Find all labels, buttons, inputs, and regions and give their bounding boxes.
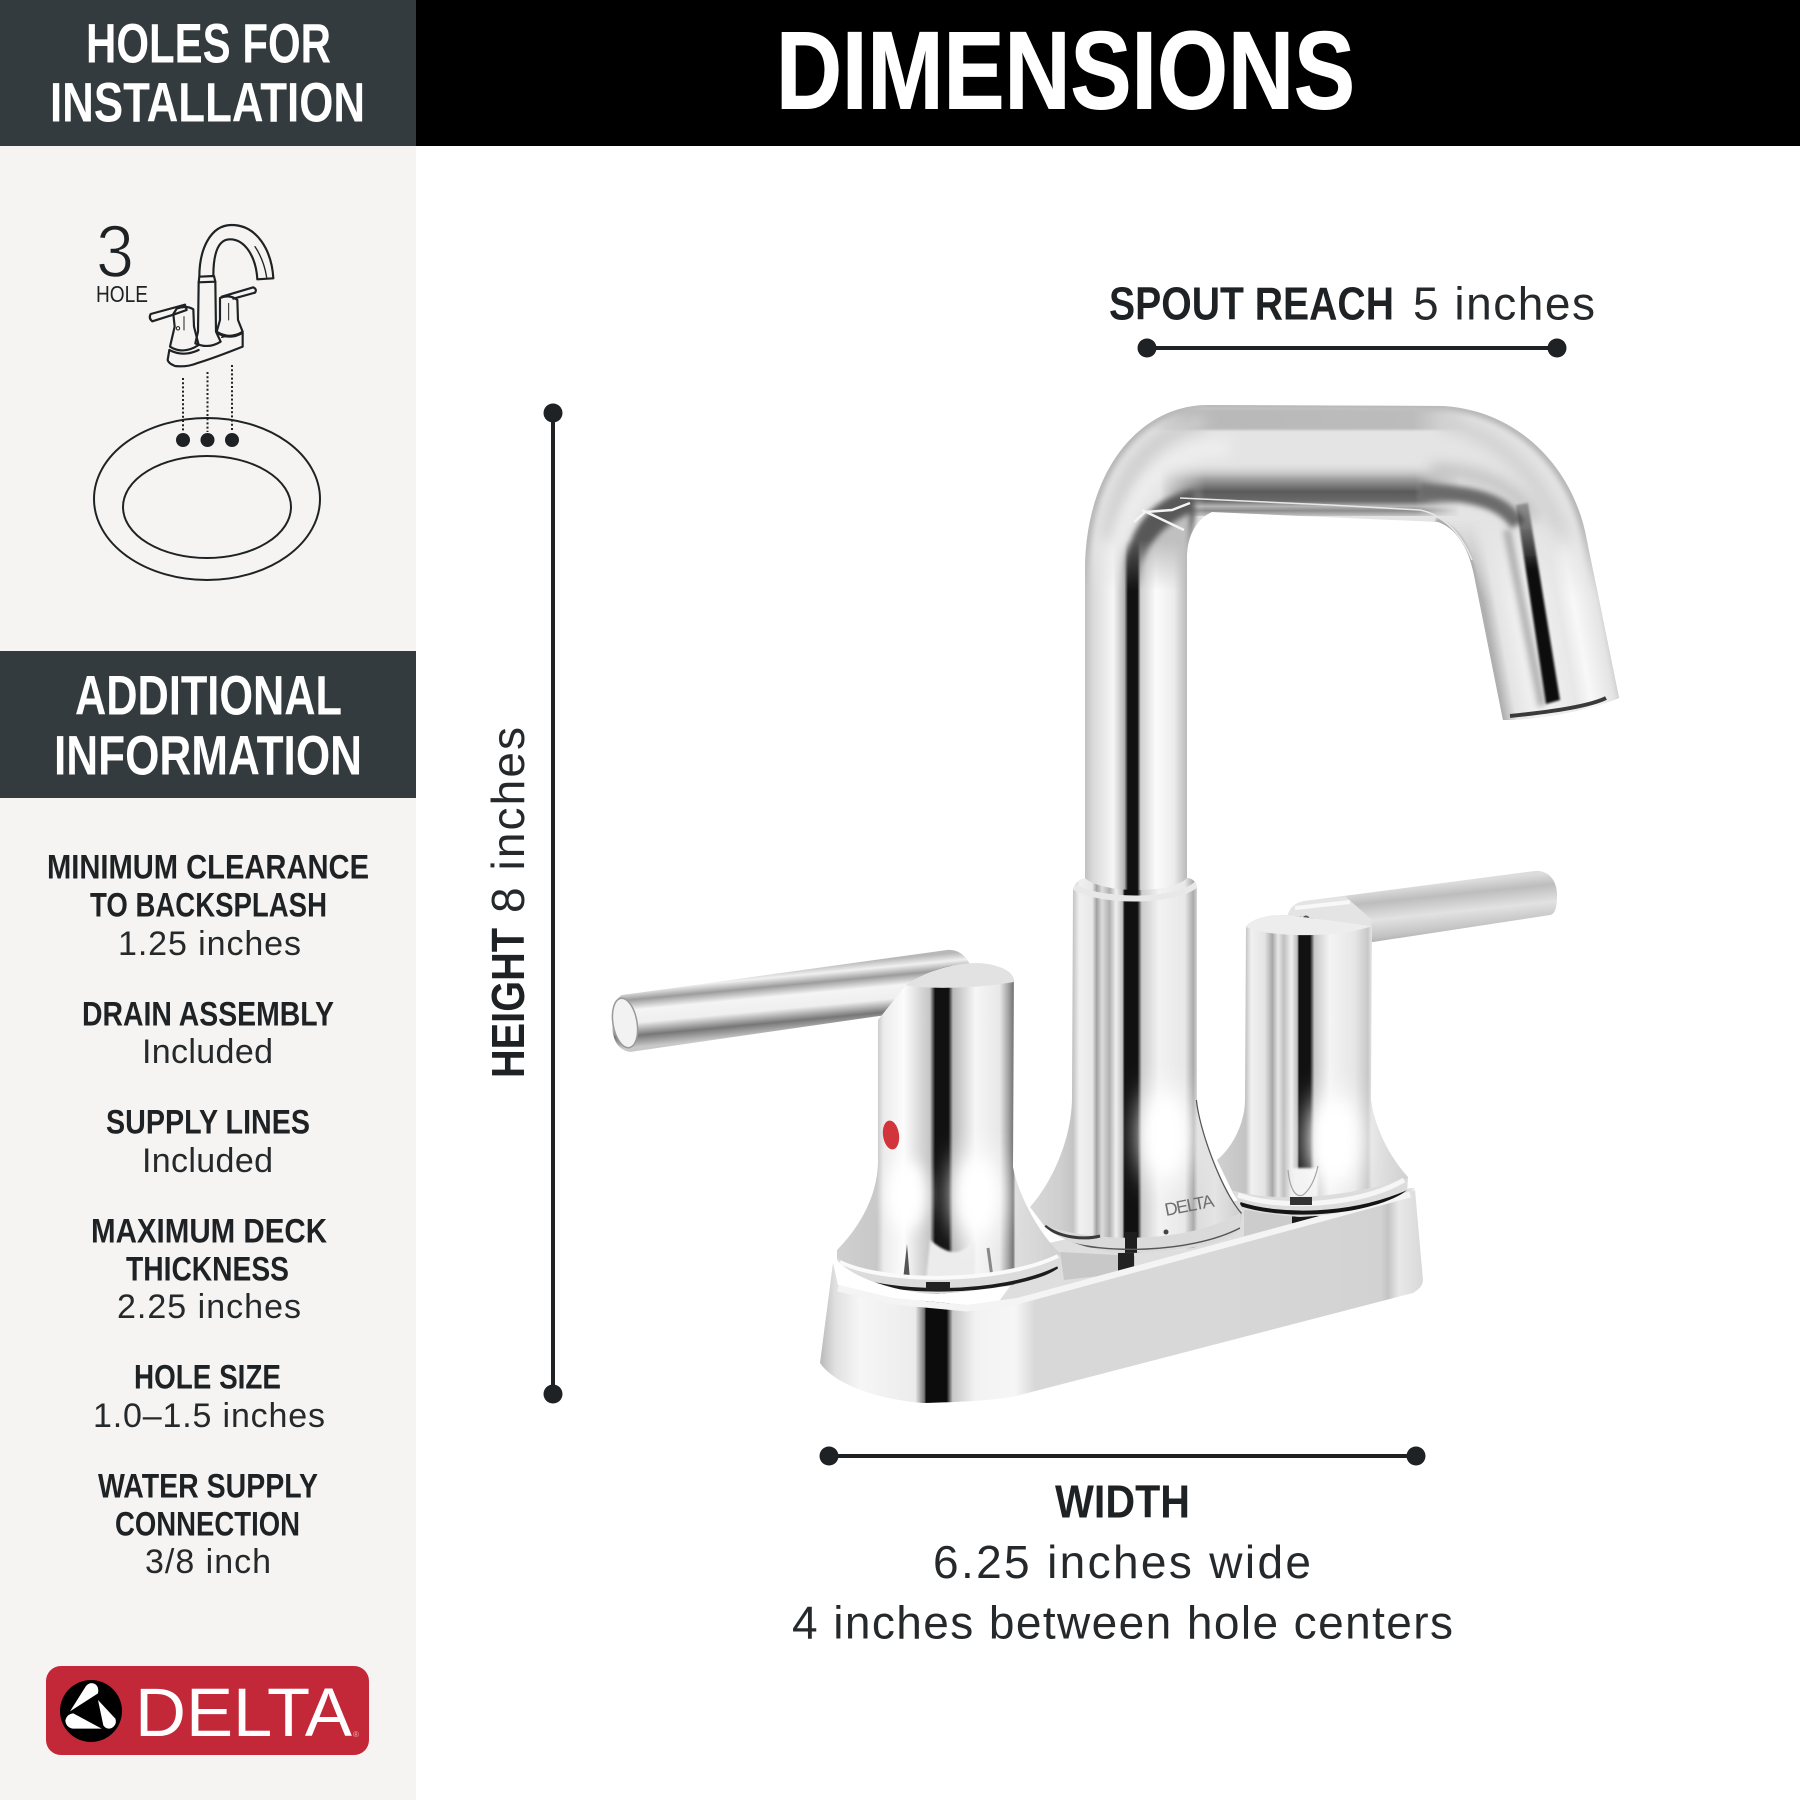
- icon: mini faucet line drawing: [150, 225, 273, 366]
- text block: maximum deck thickness: 2.25 inches: [117, 1288, 301, 1326]
- base top face: [1000, 1188, 1415, 1300]
- heading: additional information: INFORMATION: [54, 724, 362, 786]
- text block: maximum deck thickness: THICKNESS: [126, 1250, 289, 1288]
- label: 3 hole: 3: [96, 210, 134, 293]
- label: 3 hole: [96, 210, 148, 307]
- spout: [1080, 400, 1640, 900]
- dimension: height: 8 inches: [482, 727, 534, 913]
- logo: Delta: ®: [353, 1730, 359, 1739]
- left lever: [609, 950, 972, 1052]
- dimension: spout reach: [1109, 278, 1595, 358]
- text block: drain assembly: [82, 996, 334, 1071]
- text block: minimum clearance: TO BACKSPLASH: [90, 886, 327, 924]
- left handle body: [830, 955, 1065, 1300]
- heading: holes for installation: [0, 0, 416, 146]
- dimension: spout reach: 5 inches: [1413, 278, 1595, 330]
- text block: drain assembly: DRAIN ASSEMBLY: [82, 996, 334, 1034]
- arrow: spout reach line: [1138, 338, 1566, 358]
- icon: sink holes: [176, 433, 239, 447]
- logo: Delta: [46, 1666, 369, 1755]
- text block: minimum clearance: 1.25 inches: [118, 925, 301, 963]
- text block: minimum clearance: [47, 848, 369, 963]
- text block: water supply connection: WATER SUPPLY: [98, 1468, 318, 1506]
- text block: water supply connection: 3/8 inch: [145, 1543, 271, 1581]
- text block: water supply connection: [98, 1468, 318, 1581]
- icon: delta triangle mark: [60, 1680, 122, 1742]
- label: 3 hole: HOLE: [96, 281, 148, 307]
- text block: drain assembly: Included: [142, 1033, 273, 1071]
- heading: holes for installation: HOLES FOR: [86, 12, 331, 74]
- dimension: width: 4 inches between hole centers: [792, 1596, 1453, 1648]
- text block: supply lines: [106, 1104, 310, 1180]
- heading: holes for installation: INSTALLATION: [50, 70, 365, 134]
- text block: water supply connection: CONNECTION: [115, 1506, 300, 1544]
- dimension: height: HEIGHT: [482, 928, 534, 1078]
- dimension: spout reach: SPOUT REACH: [1109, 278, 1394, 330]
- right lever: [1287, 871, 1557, 945]
- dimension: width: WIDTH: [1055, 1476, 1190, 1528]
- dimension: height: [482, 404, 562, 1404]
- text block: minimum clearance: MINIMUM CLEARANCE: [47, 848, 369, 886]
- dimension: width: [792, 1446, 1453, 1648]
- text block: hole size: HOLE SIZE: [134, 1358, 281, 1396]
- title: DIMENSIONS: [776, 10, 1355, 132]
- icon: red hot indicator: [881, 1120, 901, 1150]
- right handle body: [1217, 915, 1408, 1217]
- icon: 3 hole faucet and sink diagram: [94, 210, 320, 580]
- arrow: width line: [820, 1446, 1426, 1466]
- logo: Delta: DELTA: [135, 1674, 352, 1751]
- base plate: [810, 1180, 1430, 1410]
- heading: additional information: ADDITIONAL: [75, 664, 342, 726]
- logo on collar: DELTA: DELTA: [1163, 1191, 1216, 1220]
- text block: hole size: 1.0–1.5 inches: [93, 1397, 325, 1435]
- icon: dotted drop lines: [183, 365, 232, 432]
- text block: supply lines: Included: [142, 1142, 273, 1180]
- center collar: [1025, 870, 1250, 1260]
- icon: sink outline: [94, 418, 320, 580]
- arrow: height line: [544, 404, 562, 1404]
- heading: additional information: [0, 651, 416, 798]
- dimension: width: 6.25 inches wide: [933, 1536, 1311, 1588]
- text block: supply lines: SUPPLY LINES: [106, 1104, 310, 1142]
- text block: maximum deck thickness: [91, 1212, 327, 1326]
- illustration: chrome faucet: [609, 400, 1640, 1410]
- text block: maximum deck thickness: MAXIMUM DECK: [91, 1212, 327, 1250]
- text block: hole size: [93, 1358, 325, 1435]
- panel: left sidebar: [0, 0, 416, 1800]
- title bar: dimensions: [416, 0, 1800, 146]
